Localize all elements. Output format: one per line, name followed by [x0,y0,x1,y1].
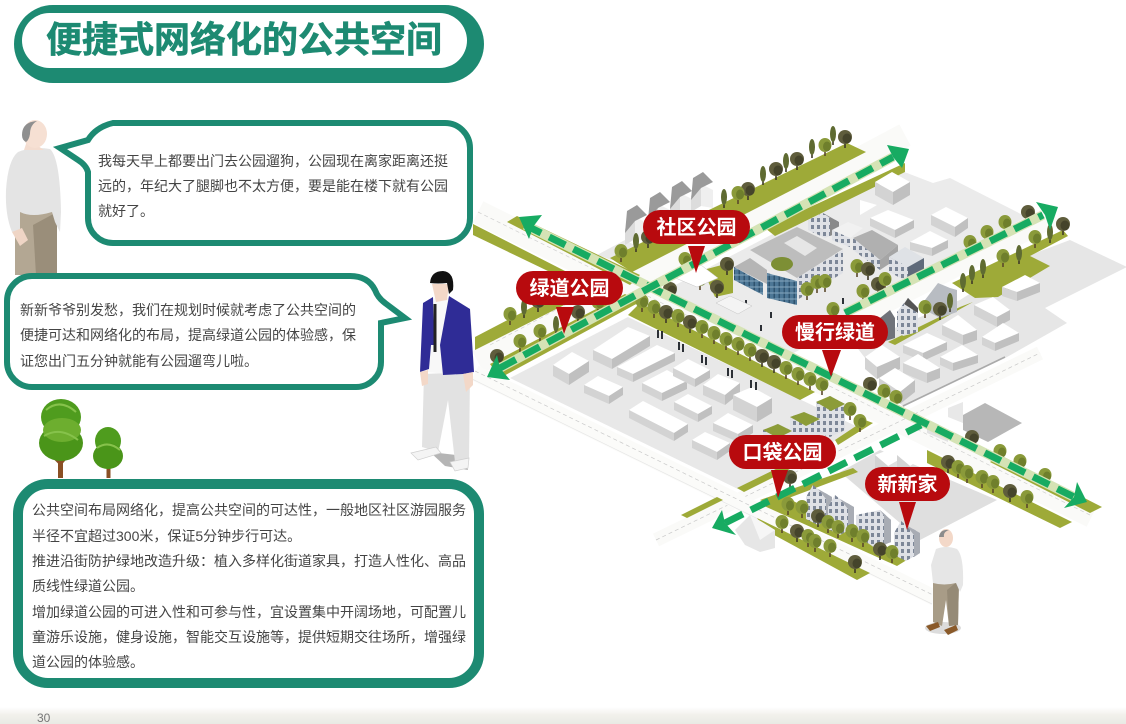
small elderly man near home [925,529,963,635]
pin: greenway park: 绿道公园 [530,277,610,300]
panel: public space guidelines: 增加绿道公园的可进入性和可参与性，宜设置集中开阔场地，可配置儿 [32,604,466,620]
pin: slow greenway [782,315,888,377]
grey corner building [927,402,1022,442]
green strips [473,143,1102,580]
arrow: southwest lower [712,510,736,535]
pin: pocket park: 口袋公园 [742,441,822,464]
plaza paving [673,262,752,314]
arrow: northwest [519,215,542,239]
title [14,5,484,83]
arrow: northeast upper [887,145,909,168]
speech bubble: planner [7,276,405,387]
pedestrians [657,298,844,390]
icon: large tree [39,399,83,478]
trees [490,126,1070,573]
panel: public space guidelines [18,484,479,683]
arrow: northeast lower [1036,202,1058,230]
green-roof towers [763,396,845,442]
panel: public space guidelines: 公共空间布局网络化，提高公共空间的可达性，一般地区社区游园服务 [32,502,466,518]
speech bubble: elderly man: 远的，年纪大了腿脚也不太方便，要是能在楼下就有公园 [98,178,448,194]
speech bubble: planner: 便捷可达和网络化的布局，提高绿道公园的体验感，保 [20,327,356,343]
greenway dashes [500,157,1074,523]
isometric city map [472,126,1126,604]
town houses [806,485,920,561]
speech bubble: planner: 新新爷爷别发愁，我们在规划时候就考虑了公共空间的 [20,302,356,318]
elderly man figure [6,120,61,275]
central building [734,227,843,305]
speech bubble: planner: 证您出门五分钟就能有公园遛弯儿啦。 [20,353,258,369]
church and row houses [880,283,957,342]
white corner house [735,515,775,552]
pin: new home: 新新家 [878,472,938,496]
arrow: southeast [1064,482,1087,508]
speech bubble: elderly man [60,123,470,243]
panel: public space guidelines: 童游乐设施，健身设施，智能交互设施等，提供短期交往场所，增强绿 [32,629,466,645]
icon: small tree [93,427,123,478]
pin: pocket park [729,435,836,498]
grey houses [625,172,713,245]
young planner figure [411,271,474,471]
pin: slow greenway: 慢行绿道 [795,321,875,344]
title: 便捷式网络化的公共空间 [46,19,442,60]
footer strip [0,707,1126,724]
white blocks [553,172,1040,480]
panel: public space guidelines: 质线性绿道公园。 [32,578,144,594]
speech bubble: elderly man: 我每天早上都要出门去公园遛狗，公园现在离家距离还挺 [98,153,448,169]
panel: public space guidelines: 道公园的体验感。 [32,654,144,670]
pin: greenway park [516,271,623,334]
speech bubble: elderly man: 就好了。 [98,203,154,219]
ground parcels [510,170,1126,540]
side buildings [808,213,924,282]
panel: public space guidelines: 半径不宜超过300米，保证5分钟步行可达。 [32,528,301,544]
panel: public space guidelines: 推进沿街防护绿地改造升级：植入多样化街道家具，打造人性化、高品 [32,553,466,569]
pin: community park: 社区公园 [656,216,736,239]
pin: new home [865,467,950,530]
pin: community park [643,210,750,273]
arrow: southwest upper [487,355,510,380]
roads [472,135,1092,604]
